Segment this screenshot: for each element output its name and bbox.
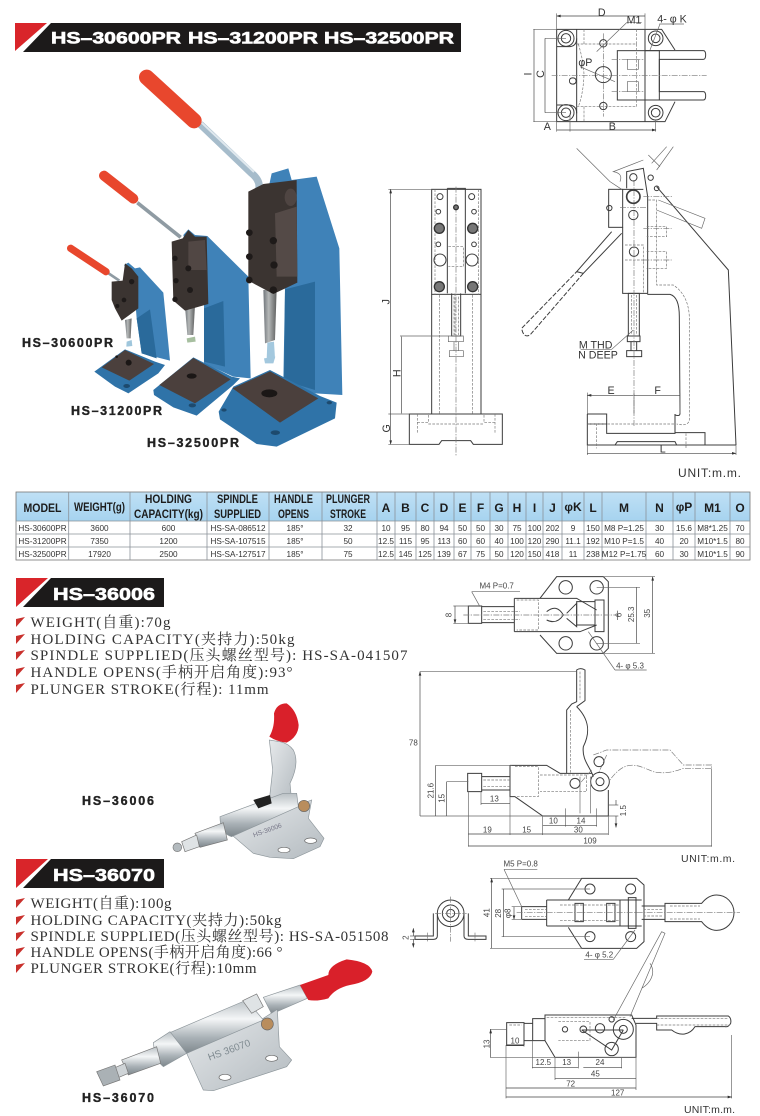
table row: HS-31200PR: 290 [546, 537, 560, 546]
table row: HS-30600PR: 15.6 [676, 524, 692, 533]
table row: HS-31200PR: 1200 [159, 537, 178, 546]
heading banner: HS-36006 [16, 578, 164, 607]
photo: HS-36006 clamp [173, 703, 324, 859]
table row: HS-31200PR: 7350 [90, 537, 109, 546]
plan view: φP [578, 57, 592, 69]
table row: HS-30600PR: 30 [655, 524, 664, 533]
side view: 72 [566, 1079, 576, 1088]
table row: HS-31200PR: 115 [399, 537, 412, 546]
spec list: HS-36006 [16, 614, 408, 698]
plan view: I [523, 73, 535, 75]
heading banner: HS-30600PR HS-31200PR HS-32500PR: HS–32500PR [324, 30, 454, 48]
spec list: HS-36070 [16, 895, 388, 977]
photo: HS-36070 clamp: HS 36070 [207, 1038, 253, 1063]
table column headings: HOLDING [145, 492, 192, 506]
table row: HS-31200PR: 120 [528, 537, 542, 546]
table row: HS-32500PR: 120 [510, 550, 524, 559]
table row: HS-30600PR: 202 [546, 524, 560, 533]
table column headings: HANDLE [274, 492, 313, 506]
table row: HS-32500PR: 125 [418, 550, 432, 559]
label: HS-30600PR: HS–30600PR [22, 336, 113, 350]
table column headings: M [619, 501, 629, 515]
technical drawing: HS-36006 [409, 577, 712, 847]
table row: HS-32500PR: 150 [528, 550, 542, 559]
table row: HS-30600PR: 80 [420, 524, 430, 533]
table row: HS-32500PR: 139 [437, 550, 451, 559]
end view [401, 897, 486, 947]
table column headings: D [440, 501, 449, 515]
specification table [16, 492, 750, 560]
top view: M5 P=0.8 [503, 860, 538, 869]
top view: 35 [643, 608, 652, 618]
table row: HS-31200PR: 113 [437, 537, 451, 546]
table row: HS-30600PR: 75 [512, 524, 522, 533]
spec list: HS-36070: HOLDING CAPACITY(夹持力):50kg [30, 912, 282, 929]
table row: HS-31200PR: 40 [494, 537, 504, 546]
table row: HS-31200PR: HS-31200PR [18, 537, 67, 546]
table column headings: SUPPLIED [214, 507, 261, 521]
table column headings: WEIGHT(g) [74, 500, 125, 514]
top view [482, 860, 740, 960]
table column headings: G [494, 501, 504, 515]
top view: 4- φ 5.3 [616, 661, 644, 670]
table row: HS-30600PR: 95 [401, 524, 410, 533]
table row: HS-30600PR: 50 [458, 524, 467, 533]
side view: 13 [482, 1039, 491, 1048]
top view: 8 [445, 612, 454, 617]
photo: HS-36006 clamp: HS-36006 [252, 822, 283, 839]
top view: M4 P=0.7 [479, 581, 514, 590]
table row: HS-32500PR: 50 [494, 550, 504, 559]
side view: F [654, 385, 661, 397]
table row: HS-31200PR: 12.5 [378, 537, 394, 546]
table column headings: J [549, 501, 556, 515]
table row: HS-31200PR: 11.1 [565, 537, 581, 546]
table row: HS-32500PR: 67 [458, 550, 467, 559]
side view: 15 [522, 825, 532, 834]
top view: 28 [494, 908, 503, 918]
heading banner: HS-36006: HS–36006 [53, 584, 155, 604]
table row: HS-32500PR: 75 [343, 550, 353, 559]
table row: HS-30600PR: HS-30600PR [18, 524, 67, 533]
table row: HS-30600PR: 9 [571, 524, 576, 533]
table column headings: I [533, 501, 536, 515]
table row: HS-32500PR: M12 P=1.75 [602, 550, 647, 559]
table column headings: PLUNGER [326, 492, 370, 506]
table row: HS-30600PR: HS-SA-086512 [210, 524, 266, 533]
spec list: HS-36070: HANDLE OPENS(手柄开启角度):66 ° [30, 943, 282, 961]
top view: 25.3 [627, 606, 636, 622]
table column headings: OPENS [278, 507, 309, 521]
heading banner: HS-30600PR HS-31200PR HS-32500PR [15, 23, 461, 52]
side view: L [660, 444, 666, 456]
table row: HS-32500PR: 2500 [159, 550, 178, 559]
spec list: HS-36006: PLUNGER STROKE(行程): 11mm [30, 681, 269, 698]
side view: 10 [511, 1037, 520, 1046]
side view: 13 [490, 795, 499, 804]
technical drawing: HS-36070 [401, 860, 740, 1098]
table row: HS-31200PR: 185° [287, 537, 303, 546]
table column headings: E [458, 501, 467, 515]
front view: H [392, 369, 404, 377]
side view: 1.5 [619, 805, 628, 816]
table row: HS-31200PR: 20 [679, 537, 689, 546]
spec list: HS-36006: WEIGHT(自重):70g [30, 614, 171, 631]
table row: HS-30600PR: 3600 [90, 524, 109, 533]
side view: 45 [591, 1070, 600, 1079]
press: HS-31200PR [104, 176, 251, 416]
table row: HS-31200PR: 80 [735, 537, 745, 546]
table column headings [24, 492, 745, 521]
label: HS-36006: HS–36006 [82, 794, 154, 808]
table row: HS-30600PR: 100 [528, 524, 542, 533]
table row: HS-32500PR [18, 550, 745, 559]
label: HS-36070: HS–36070 [82, 1091, 154, 1105]
table row: HS-31200PR: 60 [476, 537, 485, 546]
side view: 19 [483, 825, 492, 834]
table column headings: M1 [704, 501, 721, 515]
table row: HS-31200PR: 192 [586, 537, 600, 546]
side view [482, 932, 732, 1098]
spec list: HS-36006: SPINDLE SUPPLIED(压头螺丝型号): HS-SA-041507 [30, 646, 408, 664]
table row: HS-31200PR: M10*1.5 [697, 537, 728, 546]
table row: HS-30600PR: 70 [735, 524, 745, 533]
table column headings: F [477, 501, 484, 515]
spec list: HS-36006: HANDLE OPENS(手柄开启角度):93° [30, 663, 292, 681]
table row: HS-32500PR: 185° [287, 550, 303, 559]
table row: HS-32500PR: 75 [476, 550, 485, 559]
table row: HS-32500PR: 12.5 [378, 550, 394, 559]
plan view: O [568, 77, 580, 85]
top view: 41 [482, 908, 491, 917]
end view: 2 [401, 935, 410, 940]
table row: HS-31200PR: 50 [343, 537, 353, 546]
side view [409, 669, 712, 847]
side view: 24 [596, 1058, 605, 1067]
side view: 15 [437, 793, 446, 803]
technical drawing: press plan, front and side views [380, 7, 736, 457]
table column headings: MODEL [24, 501, 62, 515]
plan view: B [609, 121, 616, 133]
photo: three toggle presses [71, 77, 342, 447]
plan view [523, 7, 707, 133]
table row: HS-30600PR: M8 P=1.25 [604, 524, 644, 533]
table row: HS-32500PR: 90 [735, 550, 745, 559]
table column headings: STROKE [330, 507, 366, 521]
front view [380, 187, 502, 457]
side view: 13 [562, 1058, 572, 1067]
press: HS-32500PR [147, 77, 342, 447]
table row: HS-32500PR: 418 [546, 550, 560, 559]
side view [522, 147, 736, 456]
photo: HS-36070 clamp [97, 959, 372, 1091]
spec list: HS-36070: SPINDLE SUPPLIED(压头螺丝型号): HS-SA-051508 [30, 927, 388, 945]
top view: φ8 [504, 908, 513, 918]
plan view: C [535, 70, 547, 78]
table row: HS-30600PR: 10 [381, 524, 391, 533]
plan view: M1 [627, 14, 641, 26]
side view: 30 [574, 825, 583, 834]
table row: HS-30600PR: 600 [162, 524, 176, 533]
table row: HS-31200PR: 40 [655, 537, 664, 546]
spec list: HS-36070: PLUNGER STROKE(行程):10mm [30, 960, 257, 977]
table row: HS-30600PR [18, 524, 745, 533]
table row: HS-32500PR: 60 [655, 550, 664, 559]
label: HS-31200PR: HS–31200PR [71, 404, 162, 418]
table column headings: φK [564, 500, 582, 514]
spec list: HS-36070: WEIGHT(自重):100g [30, 895, 172, 912]
table column headings: L [589, 501, 597, 515]
table column headings: N [655, 501, 664, 515]
table row: HS-32500PR: 238 [586, 550, 600, 559]
unit note: HS-36006: UNIT:m.m. [681, 853, 735, 865]
front view: J [380, 299, 392, 304]
table row: HS-30600PR: 32 [343, 524, 353, 533]
side view: 14 [577, 816, 586, 825]
side view: 10 [549, 816, 558, 825]
heading banner: HS-36070: HS–36070 [53, 865, 155, 885]
table row: HS-32500PR: 11 [569, 550, 578, 559]
side view: 78 [409, 739, 418, 748]
table column headings: O [735, 501, 745, 515]
unit note: HS-36070: UNIT:m.m. [684, 1104, 735, 1116]
table column headings: B [401, 501, 410, 515]
table row: HS-32500PR: 30 [679, 550, 689, 559]
side view: 12.5 [536, 1058, 552, 1067]
table column headings: C [421, 501, 430, 515]
top view: 6 [615, 612, 624, 617]
table row: HS-31200PR: HS-SA-107515 [210, 537, 266, 546]
table grid [16, 492, 750, 560]
table row: HS-30600PR: 30 [494, 524, 504, 533]
press: HS-30600PR [71, 248, 170, 393]
heading banner: HS-30600PR HS-31200PR HS-32500PR: HS–31200PR [188, 30, 318, 48]
heading banner: HS-30600PR HS-31200PR HS-32500PR: HS–30600PR [51, 30, 181, 48]
plan view: 4- φ K [657, 14, 687, 26]
unit note: plan drawings: UNIT:m.m. [678, 466, 741, 480]
spec list: HS-36006: HOLDING CAPACITY(夹持力):50kg [30, 631, 295, 648]
table row: HS-31200PR: M10 P=1.5 [604, 537, 644, 546]
side view: N DEEP [578, 349, 618, 361]
top view [445, 577, 655, 670]
side view: 127 [611, 1089, 625, 1098]
table column headings: SPINDLE [217, 492, 258, 506]
table row: HS-30600PR: 94 [439, 524, 449, 533]
heading banner: HS-36070 [16, 859, 164, 888]
table row: HS-32500PR: M10*1.5 [697, 550, 728, 559]
plan view: A [544, 121, 552, 133]
side view: M THD [579, 340, 613, 352]
table row: HS-30600PR: M8*1.25 [697, 524, 728, 533]
table row: HS-32500PR: 17920 [88, 550, 111, 559]
side view: 109 [583, 836, 597, 845]
label: HS-32500PR: HS–32500PR [147, 436, 239, 450]
table row: HS-31200PR: 60 [458, 537, 467, 546]
table column headings: H [513, 501, 521, 515]
table column headings: A [382, 501, 391, 515]
table header background [16, 492, 750, 521]
side view: 21.6 [426, 782, 435, 798]
table row: HS-30600PR: 50 [476, 524, 485, 533]
table row: HS-31200PR [18, 537, 745, 546]
table row: HS-32500PR: HS-SA-127517 [210, 550, 266, 559]
table column headings: CAPACITY(kg) [134, 507, 203, 521]
table column headings: φP [676, 500, 692, 514]
table row: HS-32500PR: 145 [399, 550, 413, 559]
front view: G [381, 424, 393, 432]
top view: 4- φ 5.2 [585, 951, 614, 960]
side view: E [607, 385, 615, 397]
table row: HS-31200PR: 100 [510, 537, 524, 546]
plan view: D [598, 7, 606, 19]
table row: HS-30600PR: 185° [287, 524, 303, 533]
table row: HS-31200PR: 95 [420, 537, 430, 546]
table row: HS-30600PR: 150 [586, 524, 600, 533]
table row: HS-32500PR: HS-32500PR [18, 550, 67, 559]
